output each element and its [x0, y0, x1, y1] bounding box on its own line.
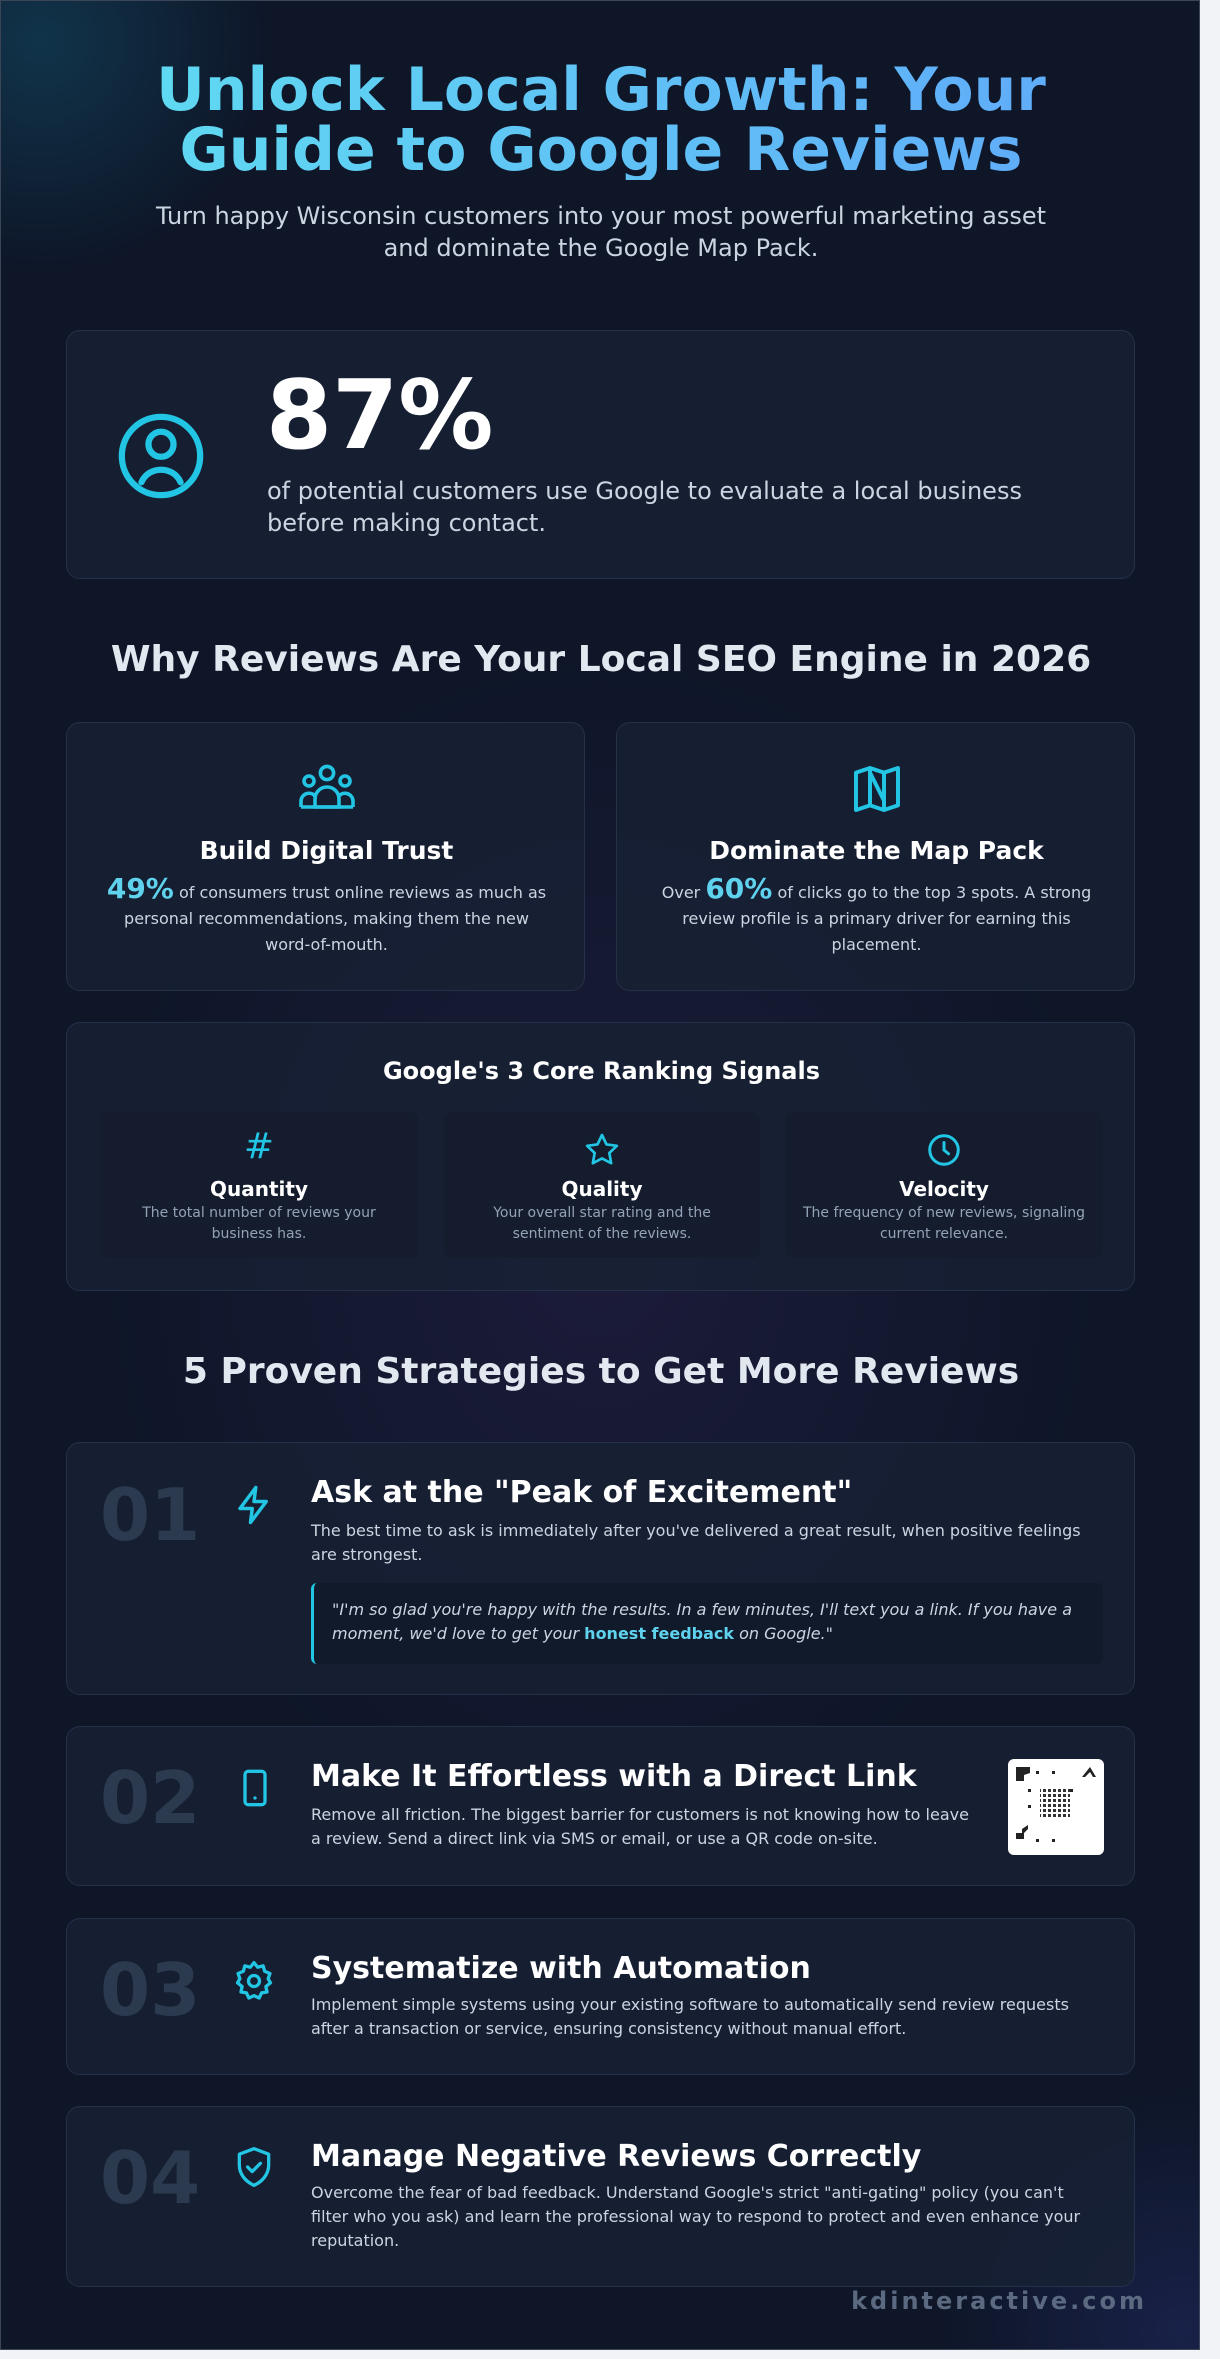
- panel: strategy 04: [66, 2106, 1135, 2287]
- panel: strategy 01: 01: [100, 1473, 200, 1557]
- icon: gear: [236, 1960, 272, 2000]
- subtitle: Turn happy Wisconsin customers into your most powerful marketing asset: [156, 202, 1046, 230]
- quote box: [311, 1583, 1103, 1664]
- card text: Over 60% of clicks go to the top 3 spots. A strong review profile is a primary driver for earning this placement.: [662, 872, 1091, 954]
- title: Unlock Local Growth: Your: [156, 55, 1046, 125]
- signal: velocity: The frequency of new reviews, signaling current relevance.: [803, 1205, 1085, 1242]
- icon: map: [854, 766, 900, 812]
- signal: velocity: Velocity: [899, 1177, 989, 1201]
- panel: strategy 04: Overcome the fear of bad feedback. Understand Google's strict "anti-gating" policy (you can't filter who you ask) and learn the professional way to respond to protect and even enhance your reputation.: [311, 2183, 1080, 2250]
- stat description: [267, 477, 1022, 537]
- panel: strategy 03: Implement simple systems using your existing software to automatically send review requests after a transaction or service, ensuring consistency without manual effort.: [311, 1995, 1069, 2038]
- panel: 87% stat: [66, 330, 1135, 579]
- signal: quantity: The total number of reviews your business has.: [142, 1205, 376, 1242]
- panel: strategy 02: 02: [100, 1756, 200, 1840]
- panel: strategy 04: Manage Negative Reviews Correctly: [311, 2139, 921, 2174]
- panel: strategy 02: Make It Effortless with a Direct Link: [311, 1759, 917, 1794]
- panel: strategy 02: Remove all friction. The biggest barrier for customers is not knowing how to leave a review. Send a direct link via SMS or email, or use a QR code on-site.: [311, 1805, 969, 1848]
- signal: quantity: Quantity: [210, 1177, 308, 1201]
- card text: 49% of consumers trust online reviews as much as personal recommendations, making them the new word-of-mouth.: [107, 872, 546, 954]
- stat description: before making contact.: [267, 509, 546, 537]
- signal: quality: [444, 1112, 760, 1258]
- heading: why reviews: Why Reviews Are Your Local SEO Engine in 2026: [111, 639, 1091, 680]
- stat description: of potential customers use Google to evaluate a local business: [267, 477, 1022, 505]
- card title: Build Digital Trust: [200, 836, 453, 865]
- signal: quality: Quality: [561, 1177, 643, 1201]
- icon: phone: [243, 1770, 267, 1806]
- QR code: [1008, 1759, 1104, 1855]
- quote box: "I'm so glad you're happy with the results. In a few minutes, I'll text you a link. If you have a moment, we'd love to get your honest feedback on Google.": [332, 1600, 1072, 1643]
- panel: strategy 02: [66, 1726, 1135, 1886]
- icon: shield check: [238, 2147, 270, 2187]
- panel: strategy 01: The best time to ask is immediately after you've delivered a great result, when positive feelings are strongest.: [311, 1521, 1081, 1564]
- icon: bolt: [238, 1486, 268, 1524]
- heading: strategies: 5 Proven Strategies to Get More Reviews: [183, 1351, 1019, 1392]
- panel title: Google's 3 Core Ranking Signals: [383, 1057, 820, 1085]
- title: [1, 60, 1201, 180]
- panel: strategy 03: [66, 1918, 1135, 2075]
- panel: build digital trust: [66, 722, 585, 991]
- panel: ranking signals: [66, 1022, 1135, 1291]
- panel: strategy 01: Ask at the "Peak of Excitement": [311, 1475, 852, 1510]
- signal: velocity: [785, 1112, 1103, 1258]
- subtitle: and dominate the Google Map Pack.: [384, 234, 818, 262]
- panel: map pack: [616, 722, 1135, 991]
- title: Guide to Google Reviews: [179, 115, 1023, 185]
- panel: strategy 03: Systematize with Automation: [311, 1951, 811, 1986]
- panel: strategy 04: 04: [100, 2136, 200, 2220]
- signal: quantity: #: [244, 1126, 274, 1167]
- card title: Dominate the Map Pack: [709, 836, 1044, 865]
- signal: quantity: [100, 1112, 418, 1258]
- panel: strategy 01: [66, 1442, 1135, 1695]
- icon: user circle: [118, 414, 204, 498]
- icon: people: [299, 764, 355, 809]
- footer brand: kdinteractive.com: [851, 2287, 1147, 2315]
- stat number: 87%: [266, 361, 493, 471]
- subtitle: [156, 202, 1046, 262]
- signal: quality: Your overall star rating and the sentiment of the reviews.: [493, 1205, 711, 1242]
- panel: strategy 03: 03: [100, 1948, 200, 2032]
